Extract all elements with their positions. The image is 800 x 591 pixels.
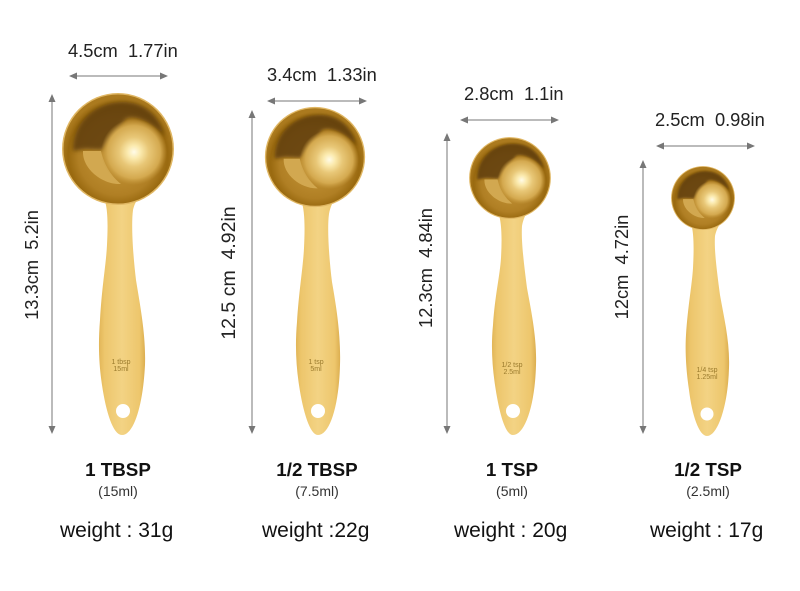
spoon 4 handle [686, 224, 729, 436]
arrow: length 3 [446, 134, 448, 433]
arrow: width 2 [268, 100, 366, 102]
caption 2: (7.5ml) [295, 483, 339, 499]
caption 4: weight : 17g [649, 519, 763, 542]
caption 2 [261, 459, 369, 542]
arrow: length 2 [251, 111, 253, 433]
spoon 4 engraving: 1/4 tsp [696, 367, 718, 374]
spoon 2 engraving: 1 tsp [308, 359, 324, 366]
spoon 3 engraving: 1/2 tsp [501, 362, 523, 369]
length label 4: 12cm 4.72in [611, 215, 632, 319]
spoon 1: 1 TBSP [62, 93, 174, 435]
spoon 1 handle [99, 198, 145, 435]
caption 1: (15ml) [98, 483, 138, 499]
spoon 3 engraving: 2.5ml [503, 369, 521, 376]
length label 2: 12.5 cm 4.92in [218, 206, 240, 340]
spoon 1 bowl [62, 93, 174, 205]
width label 4: 2.5cm 0.98in [655, 109, 765, 130]
caption 1: 1 TBSP [85, 459, 151, 480]
caption 3: 1 TSP [486, 459, 538, 480]
caption 3 [453, 459, 567, 542]
spoon 3 bowl [469, 137, 551, 219]
caption 2: weight :22g [261, 519, 369, 542]
spoon 2 handle [296, 200, 340, 435]
caption 4: (2.5ml) [686, 483, 730, 499]
length label 1: 13.3cm 5.2in [21, 210, 42, 320]
arrow: width 3 [461, 119, 558, 121]
width label 3: 2.8cm 1.1in [464, 83, 564, 104]
caption 3: (5ml) [496, 483, 528, 499]
spoon 1 engraving: 15ml [113, 366, 129, 373]
arrow: width 4 [657, 145, 754, 147]
caption 4 [649, 459, 763, 542]
spoon 3 handle [492, 212, 536, 435]
caption 4: 1/2 TSP [674, 459, 742, 480]
spoon 4 engraving: 1.25ml [696, 374, 718, 381]
caption 1: weight : 31g [59, 519, 173, 542]
spoon 2 engraving: 5ml [310, 366, 322, 373]
spoon 4: 1/2 TSP [671, 166, 735, 436]
spoon 2 bowl [265, 107, 365, 207]
spoon 3: 1 TSP [469, 137, 551, 435]
arrow: length 1 [51, 95, 53, 433]
width label 1: 4.5cm 1.77in [68, 40, 178, 61]
spoon 1 engraving: 1 tbsp [111, 359, 131, 366]
caption 1 [59, 459, 173, 542]
length label 3: 12.3cm 4.84in [415, 208, 436, 328]
caption 3: weight : 20g [453, 519, 567, 542]
arrow: width 1 [70, 75, 167, 77]
spoon 4 bowl [671, 166, 735, 230]
spoon 2: 1/2 TBSP [265, 107, 365, 435]
width label 2: 3.4cm 1.33in [267, 64, 377, 85]
arrow: length 4 [642, 161, 644, 433]
caption 2: 1/2 TBSP [276, 459, 358, 480]
